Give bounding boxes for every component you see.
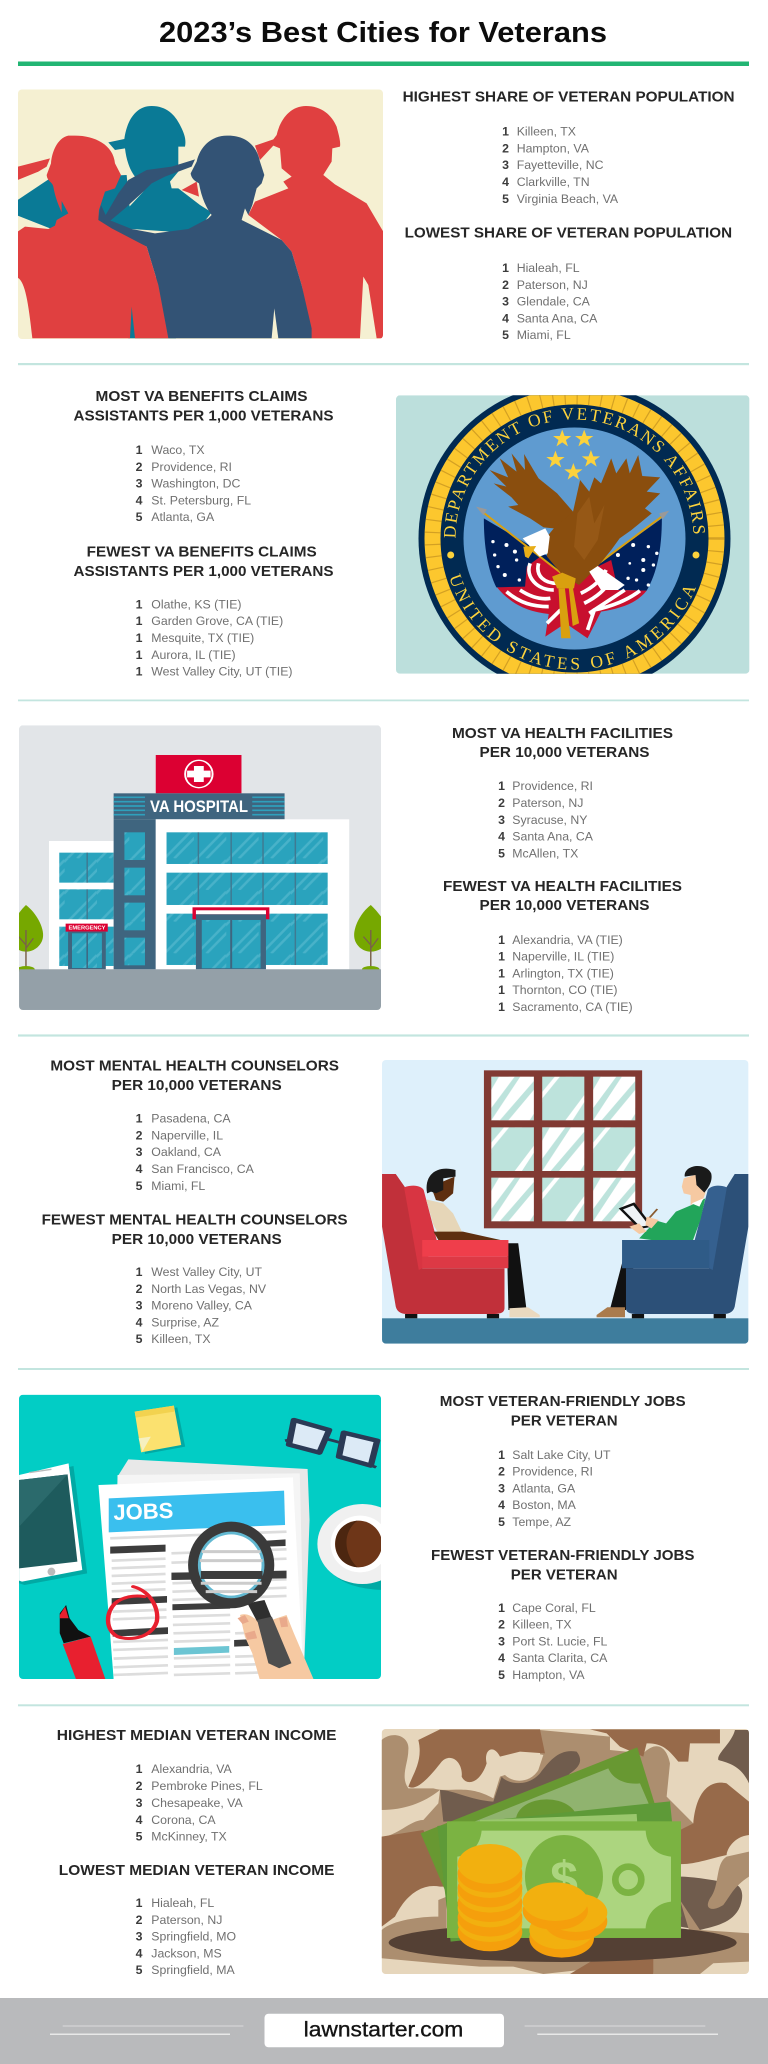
list: highest share cities: 1 (502, 124, 509, 138)
list: lowest share cities: Hialeah, FL (517, 261, 580, 275)
list: fewest claims assistants cities (136, 598, 293, 678)
list: lowest share cities: 4 (502, 312, 509, 326)
illustration: VA hospital building: EMERGENCY (68, 926, 106, 932)
list: most health facilities cities: 5 (498, 846, 505, 860)
list: highest income cities: Corona, CA (151, 1813, 216, 1827)
list: highest income cities: Alexandria, VA (151, 1762, 233, 1776)
list: most claims assistants cities: 3 (136, 476, 143, 490)
list: most jobs cities: 1 (498, 1448, 505, 1462)
heading: lowest income: LOWEST MEDIAN VETERAN INCOME (59, 1862, 335, 1879)
illustration: VA hospital building (10, 725, 389, 1010)
list: most claims assistants cities: Washington, DC (151, 476, 240, 490)
list: lowest income cities: Jackson, MS (151, 1946, 222, 1960)
list: fewest health facilities cities: 1 (498, 950, 505, 964)
list: lowest share cities: 3 (502, 294, 509, 308)
list: highest share cities: Clarkville, TN (517, 175, 590, 189)
heading: fewest claims assistants: ASSISTANTS PER 1,000 VETERANS (74, 563, 334, 580)
heading: most claims assistants: MOST VA BENEFITS CLAIMS (96, 388, 308, 405)
heading: fewest jobs: FEWEST VETERAN-FRIENDLY JOBS (431, 1547, 694, 1564)
list: lowest income cities: 2 (136, 1913, 143, 1927)
list: most health facilities cities: Santa Ana, CA (512, 830, 594, 844)
heading: most health facilities: PER 10,000 VETERANS (480, 744, 650, 761)
panel: veteran income (57, 1727, 749, 1977)
list: fewest health facilities cities (498, 933, 633, 1014)
list: most claims assistants cities: 1 (136, 443, 143, 457)
list: fewest counselors cities: West Valley City, UT (151, 1265, 262, 1279)
list: lowest income cities: 4 (136, 1946, 143, 1960)
list: fewest claims assistants cities: 1 (136, 631, 143, 645)
list: highest income cities: Pembroke Pines, FL (151, 1779, 263, 1793)
heading: most counselors: PER 10,000 VETERANS (112, 1077, 282, 1094)
list: most jobs cities: 5 (498, 1515, 505, 1529)
list: most jobs cities (498, 1448, 611, 1529)
heading: fewest health facilities: FEWEST VA HEALTH FACILITIES (443, 878, 682, 895)
list: most jobs cities: Providence, RI (512, 1464, 593, 1478)
list: fewest health facilities cities: 1 (498, 1000, 505, 1014)
website badge: lawnstarter.com (304, 2018, 463, 2042)
list: most health facilities cities: McAllen, TX (512, 846, 578, 860)
heading: fewest jobs (431, 1547, 694, 1584)
heading: fewest jobs: PER VETERAN (511, 1566, 618, 1584)
list: most counselors cities: Naperville, IL (151, 1128, 223, 1142)
list: most health facilities cities: 1 (498, 779, 505, 793)
list: most counselors cities: 1 (136, 1112, 143, 1126)
list: highest share cities: 4 (502, 175, 509, 189)
list: most claims assistants cities: 4 (136, 494, 143, 508)
illustration: counseling session (382, 1060, 748, 1344)
list: fewest counselors cities: North Las Vegas, NV (151, 1282, 267, 1296)
panel: mental health counselors (42, 1058, 748, 1346)
list: highest income cities (136, 1762, 263, 1844)
list: lowest income cities: 3 (136, 1930, 143, 1944)
list: lowest income cities: Springfield, MO (151, 1930, 236, 1944)
list: fewest health facilities cities: 1 (498, 983, 505, 997)
list: fewest claims assistants cities: Olathe, KS (TIE) (151, 598, 242, 612)
list: highest share cities: Virginia Beach, VA (517, 192, 619, 206)
heading: most health facilities: MOST VA HEALTH FACILITIES (452, 725, 673, 742)
list: lowest share cities: Miami, FL (517, 328, 571, 342)
list: fewest counselors cities (136, 1265, 267, 1346)
list: most counselors cities: Miami, FL (151, 1179, 205, 1193)
list: lowest share cities (502, 261, 598, 342)
list: most health facilities cities: 2 (498, 796, 505, 810)
list: fewest health facilities cities: Thornton, CO (TIE) (512, 983, 618, 997)
list: fewest counselors cities: 5 (136, 1332, 143, 1346)
list: lowest share cities: 5 (502, 328, 509, 342)
list: lowest share cities: Glendale, CA (517, 294, 591, 308)
illustration: Department of Veterans Affairs seal (396, 395, 750, 674)
list: most jobs cities: Atlanta, GA (512, 1482, 576, 1496)
list: fewest counselors cities: Moreno Valley, CA (151, 1298, 253, 1312)
list: lowest share cities: Santa Ana, CA (517, 312, 598, 326)
list: most jobs cities: 4 (498, 1498, 505, 1512)
list: most claims assistants cities: 2 (136, 460, 143, 474)
list: fewest counselors cities: Killeen, TX (151, 1332, 211, 1346)
illustration: VA hospital building: VA HOSPITAL (150, 798, 248, 816)
list: fewest jobs cities: 2 (498, 1618, 505, 1632)
list: fewest claims assistants cities: 1 (136, 648, 143, 662)
list: highest share cities: 3 (502, 158, 509, 172)
list: most claims assistants cities: Providence, RI (151, 460, 232, 474)
heading: fewest health facilities: PER 10,000 VETERANS (480, 897, 650, 914)
heading: most jobs: MOST VETERAN-FRIENDLY JOBS (440, 1393, 686, 1410)
list: fewest jobs cities: 3 (498, 1634, 505, 1648)
list: fewest health facilities cities: Alexandria, VA (TIE) (512, 933, 623, 947)
heading: highest income: HIGHEST MEDIAN VETERAN INCOME (57, 1727, 337, 1744)
list: most counselors cities: Pasadena, CA (151, 1112, 231, 1126)
list: lowest income cities (136, 1896, 236, 1977)
list: highest income cities: 5 (136, 1830, 143, 1844)
list: fewest jobs cities: Hampton, VA (512, 1668, 585, 1682)
list: lowest share cities: 2 (502, 278, 509, 292)
list: fewest claims assistants cities: 1 (136, 598, 143, 612)
illustration: job listings newspaper: JOBS (113, 1498, 174, 1525)
list: lowest income cities: Paterson, NJ (151, 1913, 222, 1927)
list: fewest claims assistants cities: Garden Grove, CA (TIE) (151, 614, 283, 628)
heading: most health facilities (452, 725, 673, 761)
panel: VA benefits claims (74, 388, 750, 678)
list: lowest share cities: 1 (502, 261, 509, 275)
list: most health facilities cities: 3 (498, 813, 505, 827)
illustration: job listings newspaper (19, 1395, 408, 1679)
heading: fewest claims assistants (74, 544, 334, 580)
heading: most claims assistants: ASSISTANTS PER 1,000 VETERANS (74, 408, 334, 424)
list: lowest income cities: Springfield, MA (151, 1963, 235, 1977)
list: fewest claims assistants cities: Mesquite, TX (TIE) (151, 631, 254, 645)
list: lowest income cities: 5 (136, 1963, 143, 1977)
heading: most jobs: PER VETERAN (511, 1412, 618, 1430)
list: most health facilities cities: 4 (498, 830, 505, 844)
list: highest share cities: Killeen, TX (517, 124, 576, 138)
list: fewest counselors cities: Surprise, AZ (151, 1316, 219, 1330)
list: most claims assistants cities: St. Petersburg, FL (151, 494, 251, 508)
list: fewest jobs cities (498, 1601, 608, 1682)
heading: lowest share: LOWEST SHARE OF VETERAN POPULATION (405, 224, 732, 242)
list: highest share cities: Fayetteville, NC (517, 158, 604, 172)
list: most counselors cities: 2 (136, 1128, 143, 1142)
list: most jobs cities: 3 (498, 1482, 505, 1496)
list: fewest jobs cities: Port St. Lucie, FL (512, 1634, 607, 1648)
list: most health facilities cities: Syracuse, NY (512, 813, 587, 827)
list: lowest income cities: 1 (136, 1896, 143, 1910)
list: fewest health facilities cities: 1 (498, 966, 505, 980)
list: fewest health facilities cities: Sacramento, CA (TIE) (512, 1000, 633, 1014)
list: fewest jobs cities: Killeen, TX (512, 1618, 572, 1632)
heading: fewest claims assistants: FEWEST VA BENEFITS CLAIMS (87, 544, 317, 560)
list: fewest claims assistants cities: West Valley City, UT (TIE) (151, 664, 293, 678)
panel: veteran-friendly jobs (19, 1393, 694, 1682)
list: fewest counselors cities: 3 (136, 1298, 143, 1312)
list: highest share cities: Hampton, VA (517, 142, 590, 156)
website badge (264, 2014, 504, 2047)
heading: most claims assistants (74, 388, 334, 424)
list: most claims assistants cities: 5 (136, 510, 143, 524)
heading: fewest counselors (42, 1212, 348, 1248)
heading: fewest counselors: FEWEST MENTAL HEALTH COUNSELORS (42, 1212, 348, 1228)
illustration: cash and coins on camouflage (382, 1729, 749, 1974)
list: most claims assistants cities: Waco, TX (151, 443, 205, 457)
list: most counselors cities: Oakland, CA (151, 1145, 222, 1159)
list: fewest counselors cities: 4 (136, 1316, 143, 1330)
list: fewest jobs cities: 1 (498, 1601, 505, 1615)
list: most health facilities cities (498, 779, 594, 860)
illustration: cash and coins on camouflage: $ (550, 1852, 578, 1908)
list: most counselors cities (136, 1112, 255, 1193)
list: most health facilities cities: Paterson, NJ (512, 796, 583, 810)
list: fewest health facilities cities: 1 (498, 933, 505, 947)
list: fewest jobs cities: Santa Clarita, CA (512, 1651, 608, 1665)
list: most counselors cities: 4 (136, 1162, 143, 1176)
list: most counselors cities: 5 (136, 1179, 143, 1193)
list: most jobs cities: 2 (498, 1464, 505, 1478)
illustration: Department of Veterans Affairs seal: UNITED STATES OF AMERICA (450, 573, 696, 670)
list: lowest income cities: Hialeah, FL (151, 1896, 214, 1910)
list: highest share cities: 2 (502, 142, 509, 156)
list: highest income cities: 3 (136, 1796, 143, 1810)
list: fewest jobs cities: 5 (498, 1668, 505, 1682)
list: highest share cities: 5 (502, 192, 509, 206)
list: fewest counselors cities: 1 (136, 1265, 143, 1279)
illustration: saluting soldiers (18, 90, 383, 339)
heading: highest share: HIGHEST SHARE OF VETERAN POPULATION (403, 88, 735, 106)
list: fewest counselors cities: 2 (136, 1282, 143, 1296)
heading: most counselors (50, 1058, 339, 1094)
list: highest income cities: 2 (136, 1779, 143, 1793)
list: fewest claims assistants cities: Aurora, IL (TIE) (151, 648, 236, 662)
list: fewest claims assistants cities: 1 (136, 614, 143, 628)
heading: fewest counselors: PER 10,000 VETERANS (112, 1231, 282, 1248)
illustration: Department of Veterans Affairs seal: DEPARTMENT OF VETERANS AFFAIRS (444, 408, 705, 538)
list: highest income cities: 4 (136, 1813, 143, 1827)
list: most claims assistants cities (136, 443, 251, 524)
list: most counselors cities: San Francisco, CA (151, 1162, 255, 1176)
list: highest income cities: Chesapeake, VA (151, 1796, 243, 1810)
list: fewest jobs cities: 4 (498, 1651, 505, 1665)
list: most jobs cities: Tempe, AZ (512, 1515, 572, 1529)
list: highest income cities: 1 (136, 1762, 143, 1776)
list: fewest claims assistants cities: 1 (136, 664, 143, 678)
list: most jobs cities: Boston, MA (512, 1498, 577, 1512)
footer band (0, 1998, 768, 2064)
list: most health facilities cities: Providence, RI (512, 779, 593, 793)
list: most counselors cities: 3 (136, 1145, 143, 1159)
list: fewest jobs cities: Cape Coral, FL (512, 1601, 596, 1615)
panel: VA health facilities (10, 725, 682, 1014)
heading: fewest health facilities (443, 878, 682, 914)
heading: most jobs (440, 1393, 686, 1430)
list: fewest health facilities cities: Arlington, TX (TIE) (512, 966, 614, 980)
list: highest income cities: McKinney, TX (151, 1830, 227, 1844)
list: most jobs cities: Salt Lake City, UT (512, 1448, 611, 1462)
list: lowest share cities: Paterson, NJ (517, 278, 588, 292)
list: highest share cities (502, 124, 619, 206)
title: 2023’s Best Cities for Veterans (159, 17, 607, 49)
heading: most counselors: MOST MENTAL HEALTH COUNSELORS (50, 1058, 339, 1074)
panel: veteran population (18, 88, 735, 342)
list: most claims assistants cities: Atlanta, GA (151, 510, 215, 524)
list: fewest health facilities cities: Naperville, IL (TIE) (512, 950, 614, 964)
